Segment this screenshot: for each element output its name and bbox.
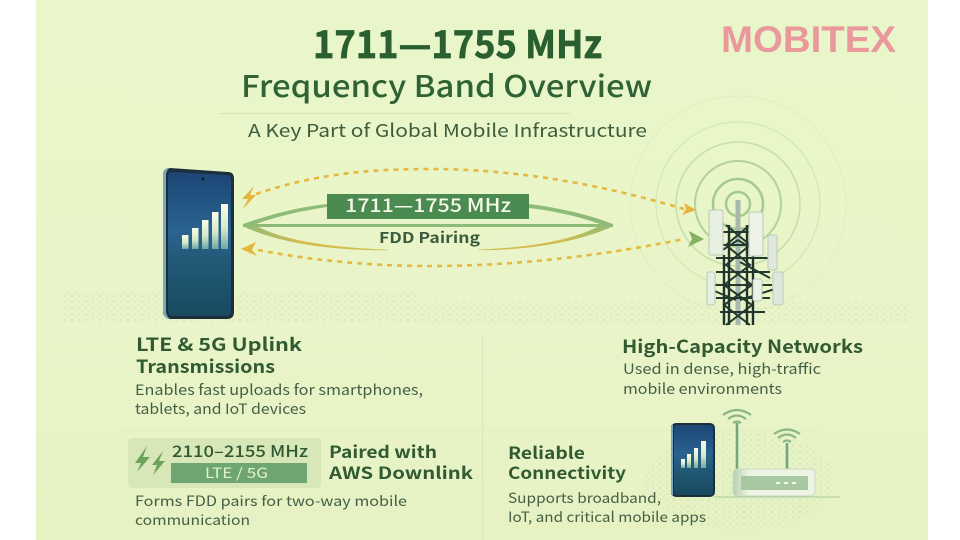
divider under heading [220,113,570,114]
description line 1: Enables fast uploads for smartphones, [135,379,423,400]
heading line 2: AWS Downlink [328,460,473,484]
heading line 1: Paired with [329,439,437,463]
description line 1: Forms FDD pairs for two-way mobile [135,491,407,511]
frequency badge: 1711—1755 MHz [345,191,511,218]
icon: small phone [671,423,715,497]
panel: high-capacity networks [622,333,863,399]
heading: uplink: LTE & 5G Uplink [136,331,302,357]
horizontal divider [120,430,820,431]
technology tag [171,463,307,483]
brand logo: MOBITEX [721,19,896,60]
vertical column divider [482,335,483,540]
bottom dashed arrow [241,231,704,266]
icon: double bolt [135,446,165,475]
FDD label: FDD Pairing [379,227,480,248]
tagline: A Key Part of Global Mobile Infrastructure [248,117,647,143]
lens-shaped FDD link [243,204,613,250]
subtitle heading: Frequency Band Overview [241,62,652,106]
title: 1711—1755 MHz [313,14,602,69]
description line 2: communication [135,510,250,530]
heading line 1: Reliable [508,440,585,464]
icon: wifi router [714,410,840,497]
downlink frequency: 2110–2155 MHz [172,438,308,462]
icon: signal rings [630,96,846,312]
description line 2: tablets, and IoT devices [135,398,306,419]
description line 2: mobile environments [623,378,782,399]
dotted ground texture [60,292,910,530]
downlink badge [128,438,321,488]
panel: LTE & 5G uplink [135,331,423,419]
heading line 2: Connectivity [508,460,627,484]
icon: lightning bolt [242,186,256,209]
icon: smartphone [163,168,234,319]
description line 1: Supports broadband, [508,488,661,508]
tag label: LTE / 5G [205,463,268,483]
panel: reliable connectivity [508,440,706,527]
heading line 2: Transmissions [136,353,275,379]
description line 2: IoT, and critical mobile apps [508,507,706,527]
panel: paired with AWS downlink [128,438,473,530]
description line 1: Used in dense, high-traffic [623,358,821,379]
heading: capacity: High-Capacity Networks [622,333,863,359]
icon: cell tower [707,200,783,325]
top dashed arrow [256,169,696,215]
